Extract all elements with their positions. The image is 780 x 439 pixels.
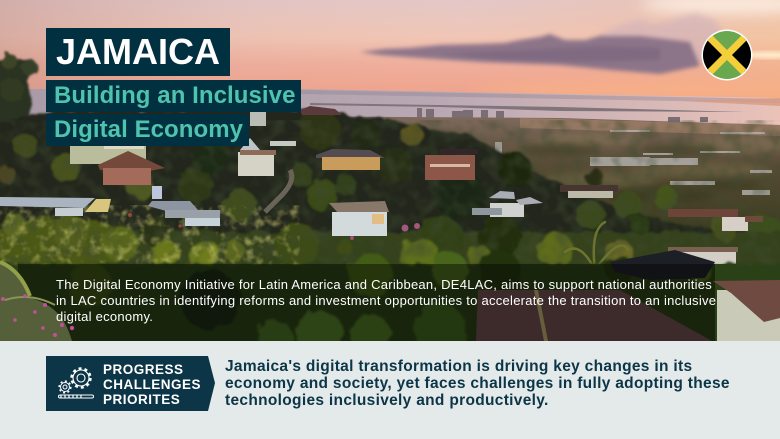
bright foreground foliage [0,214,780,278]
background photo: Kingston hillside at sunset [0,0,780,341]
houses [0,106,763,264]
label: priorites: PRIORITES [103,392,180,407]
lead statement: Jamaica's digital transformation is driving key changes in its [225,358,692,375]
road [265,170,292,212]
house: blue roof terrace left [0,197,111,216]
bottom band [0,341,780,439]
sky [0,0,780,105]
dark roof, lower centre [476,290,712,341]
icon: gears and progress bar [58,368,94,398]
dark cloud [360,13,722,74]
title: JAMAICA: JAMAICA [56,31,220,72]
lead statement: technologies inclusively and productively. [225,392,549,409]
house: grey blue roofs [148,186,220,226]
subtitle line two: Digital Economy [54,116,243,143]
badge: progress, challenges, priorities [46,356,215,411]
intro text block: in LAC countries in identifying reforms and investment opportunities to accelerate the transition to an inclusive [56,293,716,308]
hillside trees, upper [0,54,780,300]
house: white upper centre [238,112,296,176]
house: pink with brown roof [98,151,165,185]
house: roof by the sea [300,106,342,115]
house: red roofs right [668,209,763,231]
intro text block: The Digital Economy Initiative for Latin America and Caribbean, DE4LAC, aims to support national authorities [56,277,712,292]
house: white with blue roof right centre [472,191,543,217]
foliage texture [0,120,780,270]
pink flowers [128,213,420,240]
label: progress: PROGRESS [103,362,184,377]
sea [0,89,780,126]
house: dark roof [560,185,618,198]
lead statement [225,358,730,409]
intro text block [56,277,716,324]
pink flowering bush, lower left [0,262,74,341]
golden light on foliage [0,205,300,265]
palm tree [552,222,640,280]
subtitle line one: Building an Inclusive [54,82,296,109]
lower foliage [0,250,780,359]
house: white centre [329,201,389,236]
dark overlay behind intro text [18,264,715,341]
city plain [250,116,780,240]
house: pale building upper left [70,146,146,164]
intro text block: digital economy. [56,309,153,324]
house: pale with brown tiled roof, lower right [713,280,780,341]
house: upper hotel-like building [425,149,478,180]
distant skyline [417,108,708,122]
icon: Jamaican flag [702,30,752,80]
house: low right [668,247,738,264]
lead statement: economy and society, yet faces challenges in fully adopting these [225,375,730,392]
label: challenges: CHALLENGES [103,377,201,392]
house: yellow with dark roof [316,149,385,170]
